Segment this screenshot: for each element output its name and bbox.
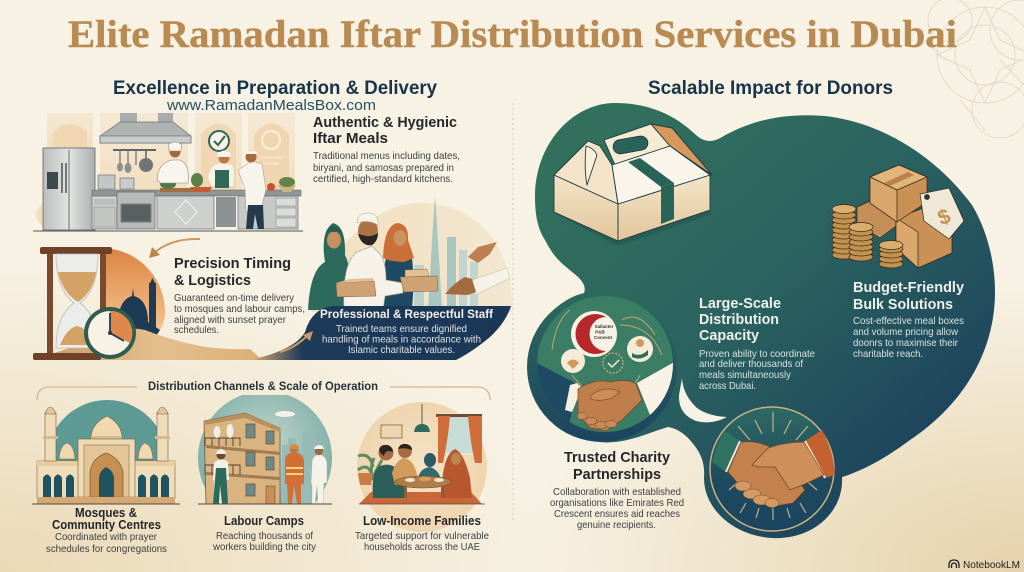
text block: authentic and hygienic [313, 114, 460, 185]
text block: low-income families: households across the UAE [364, 541, 480, 553]
text block: budget-friendly bulk solutions: and volume pricing allow [853, 326, 958, 338]
text block: large-scale distribution capacity: and deliver thousands of [699, 358, 803, 370]
text block: labour camps [212, 514, 317, 553]
title: Elite Ramadan Iftar Distribution Services in Dubai [68, 13, 957, 56]
illustration: labour camp [198, 395, 332, 504]
text block: budget-friendly bulk solutions: Budget-Friendly [853, 279, 965, 296]
illustration: kitchen [33, 113, 303, 231]
text block: authentic and hygienic: Iftar Meals [313, 130, 388, 147]
vertical dotted divider [512, 103, 514, 522]
text block: large-scale distribution capacity: meals simultaneously [699, 369, 792, 381]
text block: precision timing: schedules. [174, 324, 219, 336]
panel: professional and respectful staff: Professional & Respectful Staff [320, 307, 494, 321]
text block: mosques and community centres: Community Centres [52, 518, 161, 532]
text block: low-income families [355, 514, 489, 553]
heading: excellence in preparation and delivery: Excellence in Preparation & Delivery [113, 77, 437, 99]
text block: labour camps: Reaching thousands of [216, 530, 313, 542]
illustration: meal box [554, 124, 712, 246]
text block: budget-friendly bulk solutions: charitable reach. [853, 348, 923, 360]
illustration: staff handing out meal boxes [308, 195, 512, 312]
text block: authentic and hygienic: biryani, and samosas prepared in [313, 162, 454, 174]
text block: precision timing: Precision Timing [174, 255, 291, 272]
text block: labour camps: workers building the city [212, 541, 317, 553]
illustration: charity partner handshake circle: Sallaster [595, 324, 614, 329]
text block: trusted charity partnerships: Collaboration with established [553, 486, 681, 498]
text block: precision timing: to mosques and labour camps, [174, 303, 305, 315]
text block: large-scale distribution capacity: Proven ability to coordinate [699, 348, 815, 360]
text block: large-scale distribution capacity: Capacity [699, 327, 760, 344]
decorative arabesque pattern [925, 0, 1024, 138]
panel: professional and respectful staff [250, 306, 511, 360]
arrowhead: curved to hourglass [149, 247, 160, 258]
text block: trusted charity partnerships: Partnerships [573, 466, 661, 483]
text block: authentic and hygienic: Traditional menus including dates, [313, 150, 460, 162]
text block: large-scale distribution capacity [699, 295, 815, 392]
text block: large-scale distribution capacity: across Dubai. [699, 380, 756, 392]
text block: large-scale distribution capacity: Large-Scale [699, 295, 781, 312]
text block: budget-friendly bulk solutions: Cost-effective meal boxes [853, 315, 964, 327]
illustration: kitchen: CREASOR [260, 155, 283, 160]
illustration: charity partner handshake circle: Convent [594, 335, 613, 340]
text block: budget-friendly bulk solutions [853, 279, 965, 360]
text block: authentic and hygienic: Authentic & Hygienic [313, 114, 457, 131]
text block: labour camps: Labour Camps [224, 514, 304, 528]
heading: scalable impact for donors: Scalable Impact for Donors [648, 77, 893, 99]
notebooklm logo: NotebookLM [963, 559, 1020, 571]
panel: professional and respectful staff: Islamic charitable values. [348, 344, 455, 356]
text block: mosques and community centres: Mosques & [75, 506, 137, 520]
website url: www.RamadanMealsBox.com [166, 98, 376, 114]
panel: professional and respectful staff: handling of meals in accordance with [322, 334, 481, 346]
panel: professional and respectful staff: Trained teams ensure dignified [336, 323, 467, 335]
panel: green blob [529, 103, 995, 538]
illustration: hourglass, sunset and clock [33, 247, 262, 360]
text block: trusted charity partnerships: organisations like Emirates Red [550, 497, 684, 509]
illustration: bulk boxes, coins and price tag [832, 165, 964, 268]
text block: low-income families: Low-Income Families [363, 514, 481, 528]
illustration: large handshake circle [710, 407, 835, 531]
heading: distribution channels: Distribution Channels & Scale of Operation [148, 379, 378, 393]
text block: precision timing: Guaranteed on-time delivery [174, 292, 295, 304]
text block: precision timing: & Logistics [174, 272, 251, 289]
text block: trusted charity partnerships: Trusted Charity [564, 449, 671, 466]
text block: budget-friendly bulk solutions: doonrs to maximise their [853, 337, 958, 349]
text block: trusted charity partnerships: genuine recipients. [577, 519, 656, 531]
text block: precision timing [174, 255, 305, 336]
text block: mosques and community centres [46, 506, 167, 555]
text block: low-income families: Targeted support for vulnerable [355, 530, 489, 542]
text block: large-scale distribution capacity: Distribution [699, 311, 779, 328]
white wedge cut-out [679, 378, 727, 422]
text block: trusted charity partnerships [550, 449, 684, 531]
text block: trusted charity partnerships: Crescent ensures aid reaches [554, 508, 680, 520]
text block: mosques and community centres: schedules for congregations [46, 543, 167, 555]
illustration: mosque [32, 400, 180, 504]
text block: budget-friendly bulk solutions: Bulk Solutions [853, 296, 953, 313]
text block: precision timing: aligned with sunset prayer [174, 314, 286, 326]
illustration: charity partner handshake circle: P&B [595, 330, 605, 334]
illustration: family sharing a meal [357, 402, 487, 532]
text block: mosques and community centres: Coordinated with prayer [55, 531, 157, 543]
illustration: charity partner handshake circle [527, 292, 680, 442]
text block: authentic and hygienic: certified, high-standard kitchens. [313, 173, 453, 185]
illustration: kitchen: HOUSE [263, 161, 279, 166]
bracket: distribution channels [37, 387, 490, 400]
illustration: bulk boxes, coins and price tag: $ [934, 204, 954, 230]
arrow: curved to hourglass [153, 239, 200, 254]
